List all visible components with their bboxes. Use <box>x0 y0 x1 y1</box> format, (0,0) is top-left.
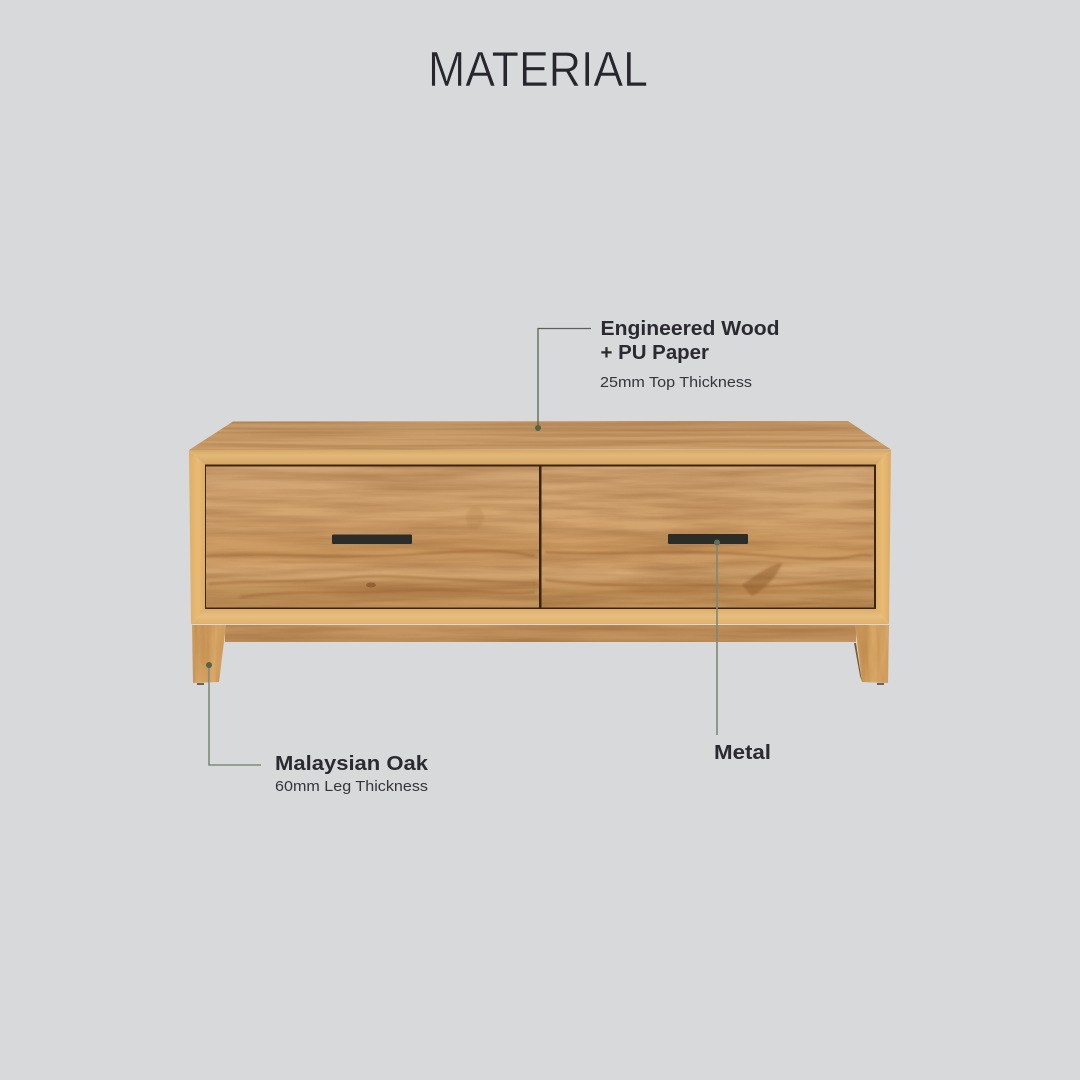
label: metal: Metal <box>714 742 771 764</box>
dot: metal <box>714 540 720 546</box>
leader line: metal <box>716 543 718 735</box>
right leg <box>854 625 889 683</box>
left leg foot <box>197 683 204 685</box>
lower rail <box>225 625 856 642</box>
label: malaysian oak: Malaysian Oak <box>275 753 429 775</box>
leader line: leg <box>209 665 261 765</box>
leader line: top <box>538 328 591 427</box>
table top surface <box>189 421 891 450</box>
left leg <box>192 625 226 683</box>
cabinet frame <box>189 450 891 624</box>
dot: leg <box>206 662 212 668</box>
callout: metal handle <box>714 540 771 764</box>
left drawer front <box>206 466 539 608</box>
right leg foot <box>877 683 884 685</box>
callout: leg material <box>206 662 429 795</box>
furniture: coffee table with two drawers <box>189 421 891 685</box>
label: engineered wood heading: Engineered Wood <box>600 318 780 340</box>
dot: top <box>535 425 541 431</box>
callout: top material <box>535 318 780 431</box>
right drawer handle <box>668 534 748 544</box>
label: PU paper heading: + PU Paper <box>600 342 709 364</box>
left drawer handle <box>332 534 412 544</box>
title: MATERIAL <box>428 43 648 97</box>
label: leg thickness: 60mm Leg Thickness <box>275 778 428 795</box>
right drawer front <box>542 466 874 608</box>
label: top thickness: 25mm Top Thickness <box>600 374 752 391</box>
